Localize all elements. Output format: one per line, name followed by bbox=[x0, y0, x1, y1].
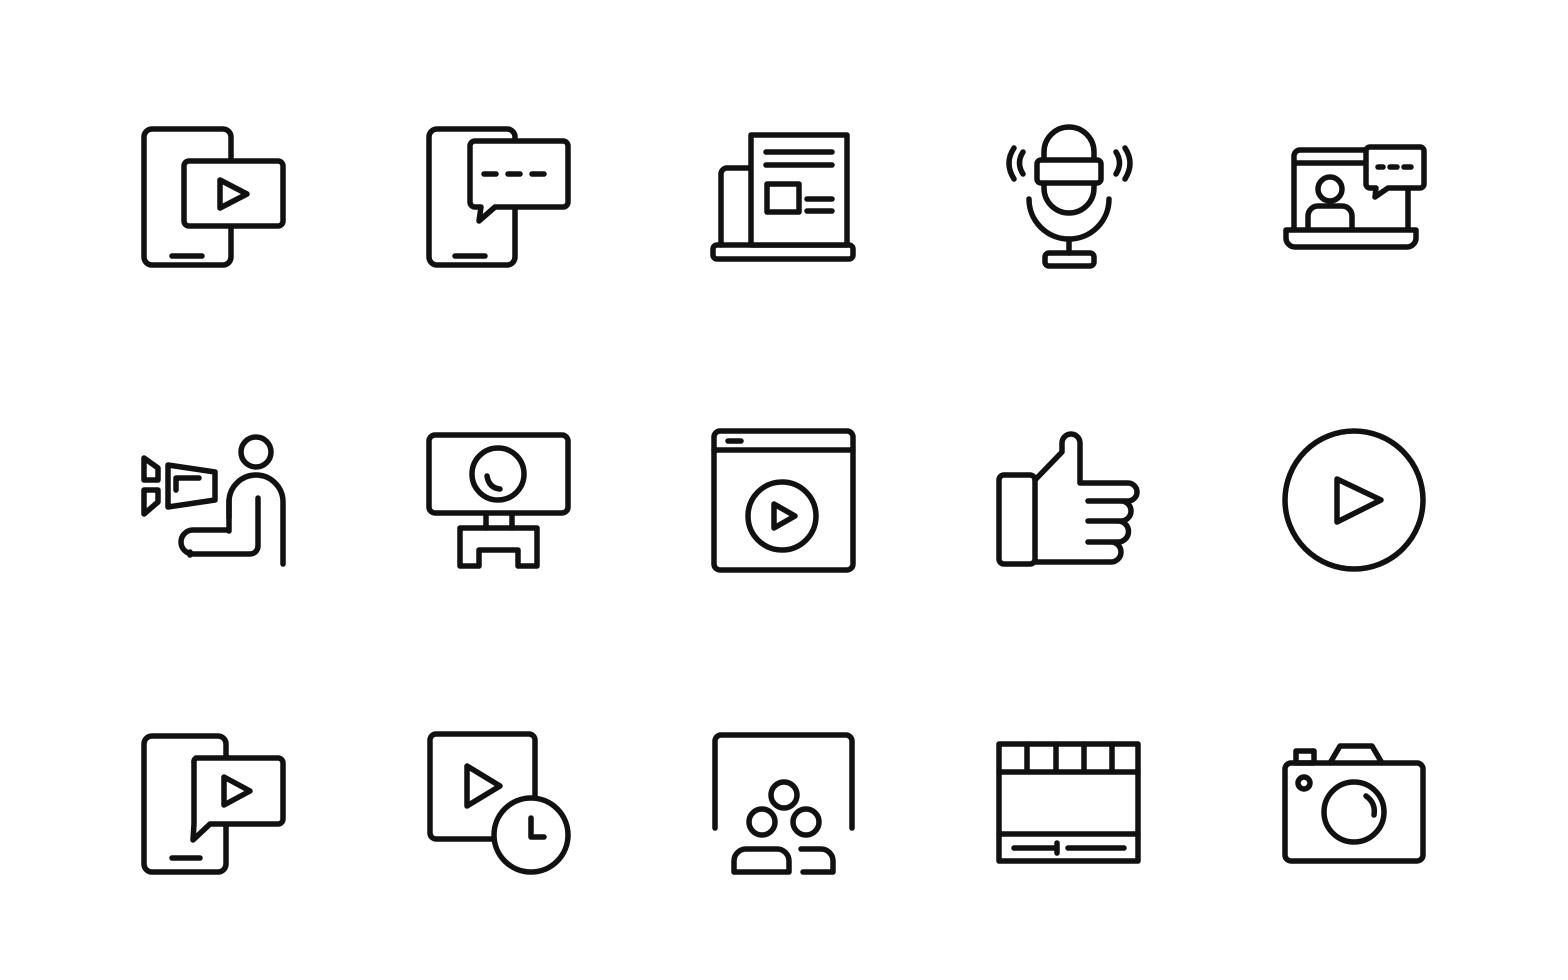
icon: person with megaphone bbox=[144, 437, 283, 564]
icon: monitor with webcam bbox=[429, 435, 568, 566]
icon: laptop video call bbox=[1286, 147, 1424, 247]
icon: phone with video bbox=[144, 129, 283, 265]
icon: thumbs up bbox=[999, 434, 1137, 564]
icon: podcast microphone bbox=[1009, 127, 1130, 266]
icon: laptop with newspaper bbox=[713, 135, 853, 259]
icon: audience screen bbox=[715, 735, 852, 872]
icon: camera bbox=[1285, 746, 1423, 861]
icon: film clapper player bbox=[999, 744, 1138, 861]
icon: phone with chat bubble bbox=[429, 129, 568, 265]
icon: browser video bbox=[714, 431, 853, 570]
icon: video with clock bbox=[430, 734, 568, 872]
icon: play circle bbox=[1285, 431, 1423, 569]
icon: phone with video message bbox=[144, 736, 283, 872]
